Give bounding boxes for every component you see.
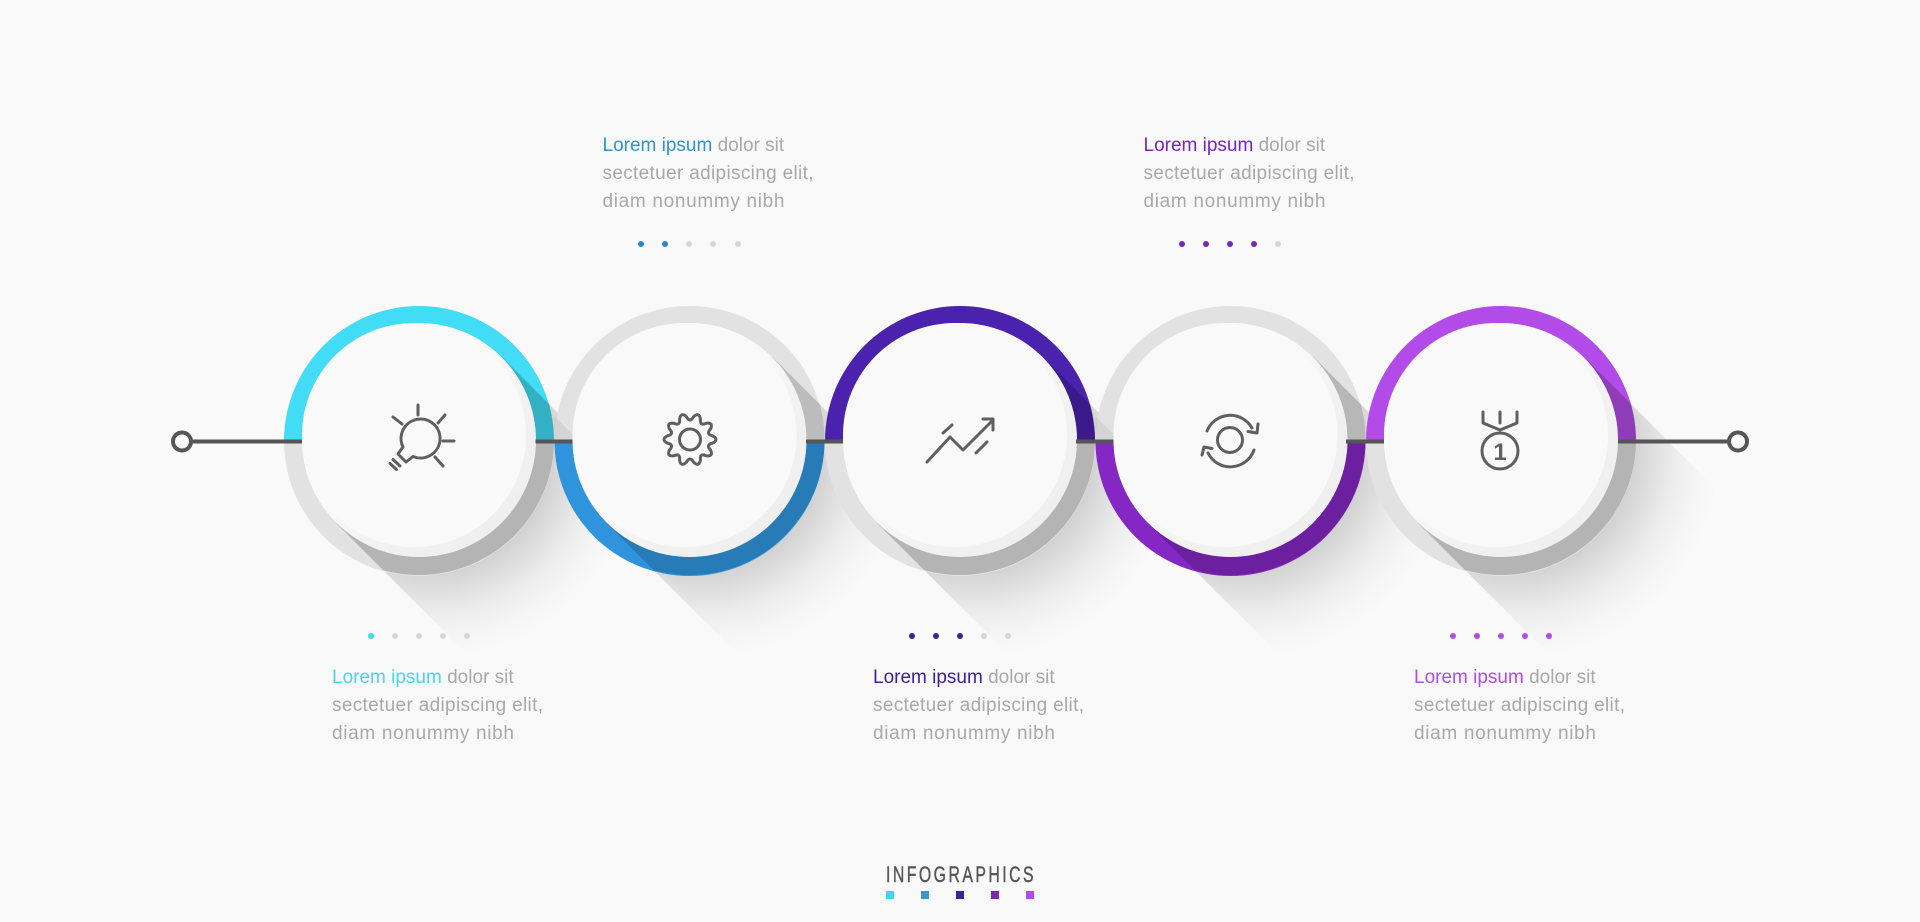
step 1 circle <box>171 306 586 625</box>
text block 3 <box>873 667 1084 744</box>
text block 2: diam nonummy nibh <box>602 191 784 212</box>
text block 3: Lorem ipsum dolor sit <box>873 667 1055 688</box>
text block 3: diam nonummy nibh <box>873 723 1055 744</box>
text block 5 <box>1414 667 1625 744</box>
progress dots 2 <box>638 241 741 247</box>
icon: refresh arrows <box>1202 415 1258 467</box>
progress dots 1 <box>368 633 470 639</box>
text block 3: sectetuer adipiscing elit, <box>873 695 1084 716</box>
icon: light bulb <box>390 405 454 470</box>
progress dots 3 <box>909 633 1011 639</box>
progress dots 4 <box>1179 241 1281 247</box>
icon: rising chart arrow <box>927 419 993 462</box>
title: INFOGRAPHICS <box>886 864 1034 888</box>
text block 2: sectetuer adipiscing elit, <box>602 163 814 184</box>
text block 4: sectetuer adipiscing elit, <box>1144 163 1354 184</box>
text block 1: Lorem ipsum dolor sit <box>332 667 514 688</box>
text block 5: Lorem ipsum dolor sit <box>1414 667 1596 688</box>
step 2 circle <box>536 306 857 625</box>
text block 5: sectetuer adipiscing elit, <box>1414 695 1625 716</box>
icon: medal: 1 <box>1493 439 1507 466</box>
progress dots 5 <box>1450 633 1552 639</box>
text block 5: diam nonummy nibh <box>1414 723 1596 744</box>
step 4 circle <box>1076 306 1398 625</box>
text block 1: diam nonummy nibh <box>332 723 514 744</box>
step 5 circle <box>1346 306 1749 625</box>
text block 2 <box>602 135 814 212</box>
text block 4: Lorem ipsum dolor sit <box>1144 135 1326 156</box>
icon: gear <box>664 415 716 464</box>
icon: medal <box>1482 412 1518 469</box>
text block 2: Lorem ipsum dolor sit <box>602 135 785 156</box>
text block 1 <box>332 667 543 744</box>
legend squares <box>886 891 1034 899</box>
text block 4 <box>1144 135 1354 212</box>
step 3 circle <box>806 306 1128 625</box>
text block 4: diam nonummy nibh <box>1144 191 1326 212</box>
text block 1: sectetuer adipiscing elit, <box>332 695 543 716</box>
